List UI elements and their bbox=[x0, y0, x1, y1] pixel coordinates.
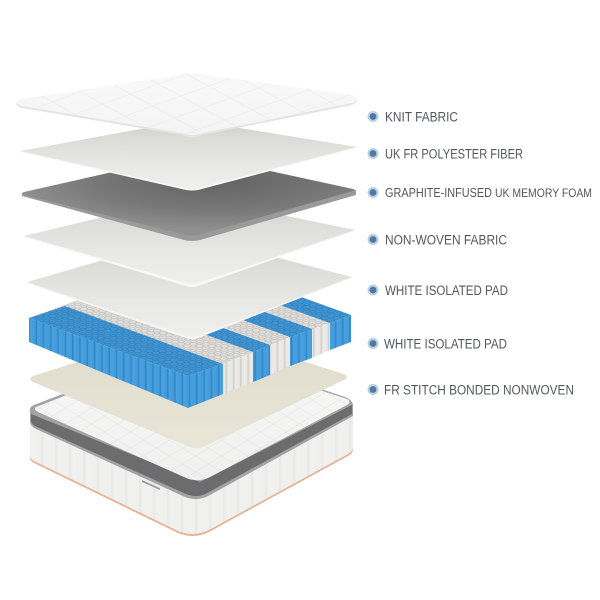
base mattress bbox=[30, 345, 353, 536]
label: stitch bonded nonwoven: FR STITCH BONDED NONWOVEN bbox=[384, 382, 574, 398]
spring left face bbox=[29, 318, 188, 408]
mattress body with peach base bbox=[30, 412, 353, 536]
spring top surface bbox=[29, 258, 351, 376]
label: knit fabric: KNIT FABRIC bbox=[385, 110, 458, 124]
spring right face bbox=[188, 315, 351, 408]
label: white isolated pad lower: WHITE ISOLATED PAD bbox=[384, 336, 507, 352]
layer: knit fabric bbox=[16, 74, 358, 138]
layer: pocket springs bbox=[29, 258, 351, 408]
legend bbox=[368, 110, 592, 398]
mattress label tag bbox=[142, 480, 160, 490]
layer: graphite memory foam bbox=[22, 154, 356, 241]
exploded mattress illustration bbox=[16, 74, 358, 536]
layer: beige stitch bonded nonwoven bbox=[30, 326, 347, 448]
label: white isolated pad upper: WHITE ISOLATED PAD bbox=[385, 283, 508, 298]
mattress grey border band bbox=[30, 345, 353, 499]
mattress quilted top bbox=[35, 347, 350, 480]
layer: white isolated pad upper bbox=[23, 196, 355, 287]
label: non-woven fabric: NON-WOVEN FABRIC bbox=[385, 232, 507, 248]
label: polyester fiber: UK FR POLYESTER FIBER bbox=[385, 146, 523, 162]
layer: polyester fiber bbox=[20, 120, 357, 190]
label: graphite memory foam bbox=[368, 185, 592, 200]
layer: white isolated pad lower bbox=[26, 235, 352, 339]
label: graphite memory foam: GRAPHITE-INFUSED bbox=[385, 185, 492, 200]
